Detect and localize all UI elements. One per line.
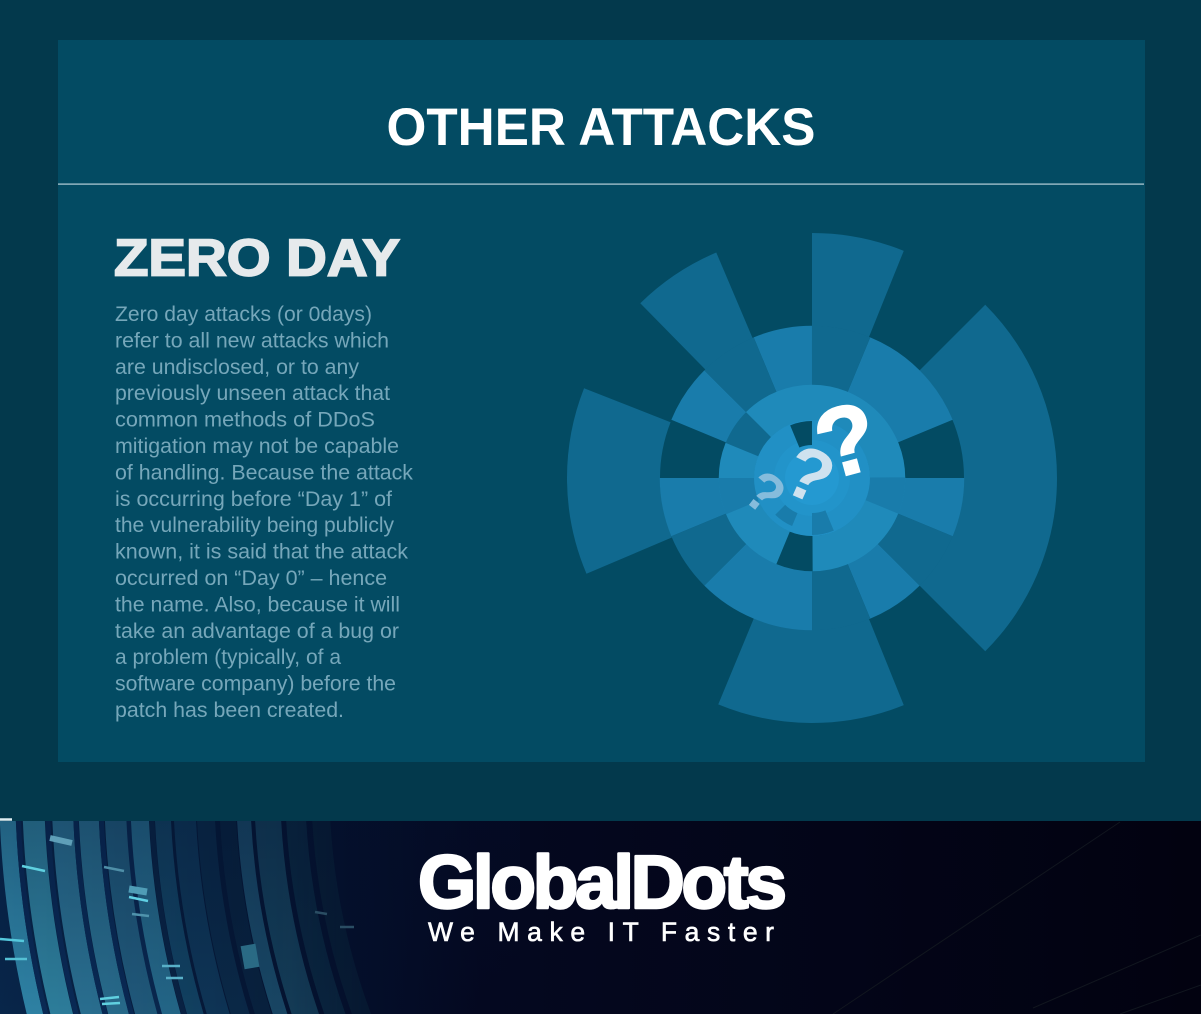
text block: zero day description <box>115 303 413 722</box>
text block: zero day description: known, it is said that the attack <box>115 541 409 564</box>
faint diagonal lines <box>833 822 1201 1014</box>
footer banner <box>0 820 1201 1014</box>
logo: GlobalDots: GlobalDots <box>418 840 787 924</box>
text block: zero day description: software company) before the <box>115 673 396 696</box>
text block: zero day description: take an advantage of a bug or <box>115 620 399 643</box>
text block: zero day description: mitigation may not be capable <box>115 435 399 458</box>
text block: zero day description: previously unseen attack that <box>115 382 390 405</box>
text block: zero day description: occurred on “Day 0” – hence <box>115 567 387 590</box>
light dashes <box>0 820 354 1004</box>
tunnel arcs <box>8 821 361 1014</box>
text block: zero day description: are undisclosed, or to any <box>115 356 359 379</box>
chart: radial sector graphic <box>531 197 1093 759</box>
text block: zero day description: Zero day attacks (or 0days) <box>115 303 372 326</box>
text block: zero day description: is occurring before “Day 1” of <box>115 488 392 511</box>
text block: zero day description: common methods of DDoS <box>115 409 375 432</box>
text block: zero day description: a problem (typically, of a <box>115 646 341 669</box>
outer ring sectors <box>531 197 1093 759</box>
icon: question mark large: ? <box>803 379 889 501</box>
shade over arcs <box>0 821 520 1014</box>
second ring sectors, dark tone <box>639 305 985 651</box>
icon: question mark small: ? <box>732 457 798 528</box>
tagline: We Make IT Faster <box>428 917 774 947</box>
text block: zero day description: refer to all new attacks which <box>115 329 389 352</box>
text block: zero day description: of handling. Because the attack <box>115 461 413 484</box>
text block: zero day description: the name. Also, because it will <box>115 593 400 616</box>
inner disc sectors <box>752 418 872 538</box>
subheading: zero day: ZERO DAY <box>114 230 400 288</box>
text block: zero day description: patch has been created. <box>115 699 344 722</box>
text block: zero day description: the vulnerability being publicly <box>115 514 394 537</box>
panel: other attacks <box>58 40 1145 762</box>
heading: other attacks: OTHER ATTACKS <box>386 98 816 157</box>
inner disc <box>754 420 870 536</box>
second ring sectors, mid tone <box>639 305 985 651</box>
icon: question mark medium: ? <box>772 428 847 522</box>
third ring <box>713 379 911 577</box>
